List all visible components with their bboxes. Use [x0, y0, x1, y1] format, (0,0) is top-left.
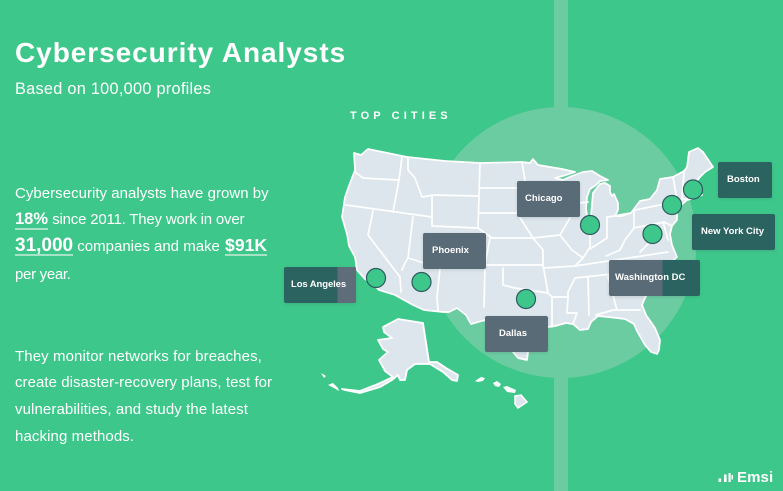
- text block: job duties: create disaster-recovery plans, test for: [15, 374, 272, 391]
- text block: job duties: vulnerabilities, and study the latest: [15, 401, 248, 418]
- text block: job duties: [15, 348, 272, 445]
- label: New York City: New York City: [701, 226, 764, 237]
- Aleutian islands and Hawaii: [321, 373, 527, 408]
- label: Chicago: [517, 181, 580, 217]
- state borders: [346, 157, 695, 327]
- text block: growth statistics: 18%: [15, 210, 48, 228]
- city marker: Phoenix: [412, 272, 431, 292]
- text block: growth statistics: [15, 185, 269, 283]
- label: Dallas: Dallas: [499, 328, 527, 339]
- label: New York City: [692, 214, 775, 250]
- contiguous states: [342, 148, 713, 360]
- label: Los Angeles: [284, 267, 356, 303]
- city marker: Los Angeles: [366, 268, 386, 288]
- city marker: Washington DC: [643, 224, 662, 244]
- text block: growth statistics: Cybersecurity analysts have grown by: [15, 185, 269, 202]
- label: Chicago: Chicago: [525, 193, 562, 204]
- text block: growth statistics: per year.: [15, 266, 71, 283]
- label: Washington DC: Washington DC: [615, 272, 685, 283]
- text block: job duties: hacking methods.: [15, 428, 134, 445]
- text block: growth statistics: 31,000: [15, 235, 73, 256]
- text block: job duties: They monitor networks for breaches,: [15, 348, 262, 365]
- map heading: TOP CITIES: [350, 110, 452, 122]
- label: Boston: Boston: [727, 174, 760, 185]
- city marker: New York City: [662, 196, 682, 214]
- label: Phoenix: [423, 233, 486, 269]
- city marker: Chicago: [580, 216, 600, 234]
- title: Cybersecurity Analysts: [15, 37, 346, 68]
- text block: growth statistics: since 2011. They work in over: [52, 211, 244, 228]
- label: Phoenix: Phoenix: [432, 245, 469, 256]
- label: Boston: [718, 162, 772, 198]
- label: Los Angeles: Los Angeles: [291, 279, 346, 290]
- label: Dallas: [485, 316, 548, 352]
- logo: Emsi: Emsi: [737, 469, 773, 486]
- text block: growth statistics: $91K: [225, 235, 267, 255]
- label: Washington DC: [609, 260, 700, 296]
- Alaska: [342, 319, 458, 393]
- city marker: Dallas: [516, 290, 536, 308]
- subtitle: Based on 100,000 profiles: [15, 80, 211, 98]
- text block: growth statistics: companies and make: [77, 238, 220, 255]
- logo: Emsi: [718, 469, 773, 486]
- city marker: Boston: [684, 180, 702, 199]
